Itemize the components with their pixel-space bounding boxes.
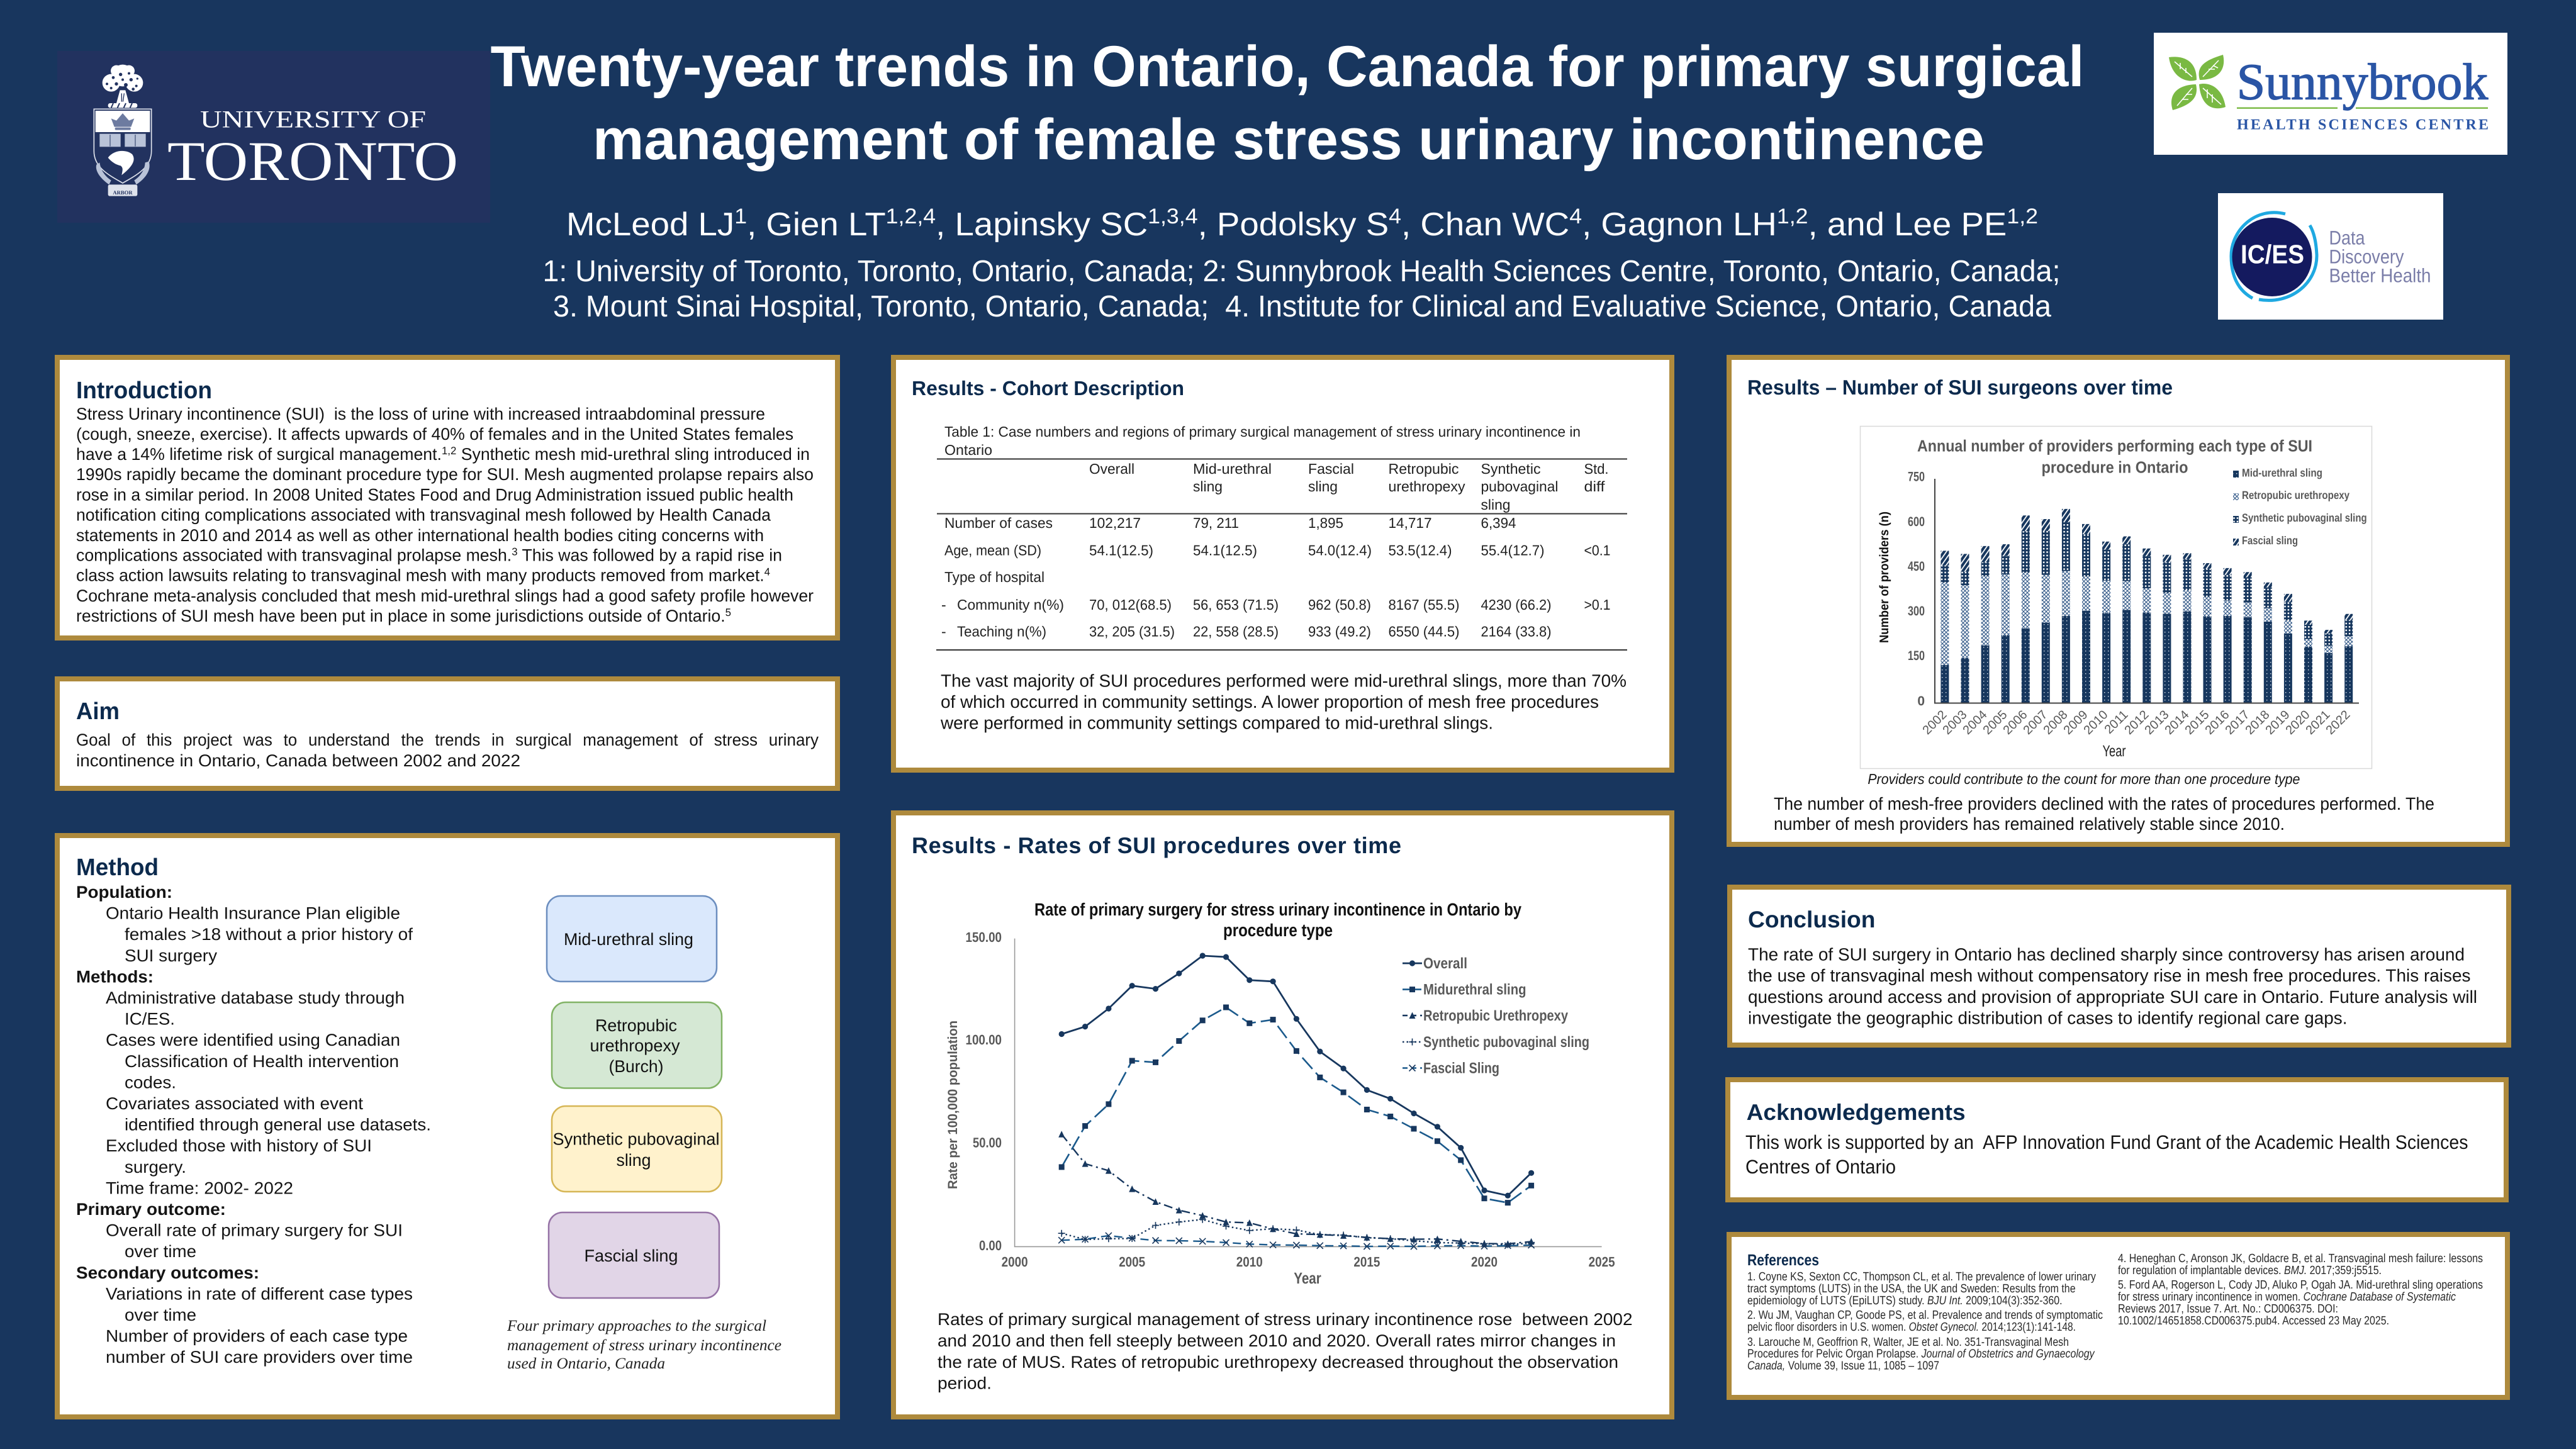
tagline: Better Health: [2329, 265, 2431, 287]
table row: age: <0.1: [1584, 542, 1611, 559]
y axis labels: 0: [1917, 694, 1925, 708]
text block: method details: over time: [125, 1242, 196, 1261]
table header: Fascial: [1308, 461, 1354, 477]
line chart: rate of primary surgery: [946, 900, 1615, 1287]
x axis labels: 2018: [2243, 708, 2273, 737]
panel: results rates of SUI procedures: [893, 813, 1672, 1417]
text block: method details: SUI surgery: [125, 946, 218, 965]
bars: synthetic pubovaginal sling: [1940, 522, 2353, 646]
wordmark: [167, 106, 458, 193]
box: synthetic pubovaginal sling: sling: [617, 1151, 651, 1170]
table header: [1089, 461, 1608, 513]
box: retropubic urethropexy: Retropubic: [595, 1016, 677, 1035]
references: left column: 2. Wu JM, Vaughan CP, Goode PS, et al. Prevalence and trends of symptomatic: [1747, 1309, 2103, 1322]
references: left column: 3. Larouche M, Geoffrion R, Walter, JE et al. No. 351-Transvaginal Mesh: [1747, 1336, 2069, 1349]
figure caption: Four primary approaches to the surgical: [507, 1318, 766, 1334]
x axis labels: 2010: [1236, 1254, 1263, 1270]
table row: age: [944, 542, 1611, 559]
series: midurethral sling: [1061, 1007, 1532, 1203]
wordmark: UNIVERSITY OF: [200, 106, 426, 133]
authors: 1: [734, 204, 747, 228]
text block: conclusion body: investigate the geographic distribution of cases to identify regional care gaps.: [1748, 1008, 2347, 1027]
text block: method details: IC/ES.: [125, 1010, 175, 1029]
text block: cohort summary: [940, 671, 1627, 732]
tagline: Discovery: [2329, 245, 2404, 267]
icon: four green leaves: [2169, 55, 2226, 110]
text block: rates summary: [938, 1310, 1632, 1393]
figure caption: used in Ontario, Canada: [507, 1355, 665, 1372]
x axis labels: 2022: [2324, 708, 2353, 737]
references: right column: 4. Heneghan C, Aronson JK, Goldacre B, et al. Transvaginal mesh failure: lessons: [2118, 1252, 2483, 1265]
heading: rates of procedures: Results - Rates of SUI procedures over time: [912, 832, 1401, 858]
table header: urethropexy: [1388, 478, 1465, 495]
references: right column: for regulation of implantable devices. BMJ. 2017;359:j5515.: [2118, 1264, 2382, 1277]
text block: method details: Time frame: 2002- 2022: [106, 1178, 293, 1197]
heading: method: Method: [76, 854, 159, 881]
wordmark: Sunnybrook: [2237, 53, 2488, 111]
box: retropubic urethropexy: [552, 1002, 722, 1088]
x axis labels: 2014: [2163, 708, 2192, 737]
icon: IC/ES circle: [2231, 213, 2317, 300]
y axis labels: 600: [1908, 515, 1925, 529]
table row: type of hospital: Type of hospital: [944, 569, 1044, 585]
text block: method details: Classification of Health intervention: [125, 1052, 399, 1071]
table caption: Ontario: [944, 442, 992, 458]
text block: aim body: incontinence in Ontario, Canada between 2002 and 2022: [76, 751, 520, 770]
title: [491, 35, 2084, 172]
box: fascial sling: [549, 1212, 719, 1298]
text block: introduction body: rose in a similar period. In 2008 United States Food and Drug Administration issued public health: [76, 486, 793, 505]
text block: introduction body: 4: [764, 566, 770, 578]
x axis labels: 2011: [2102, 708, 2131, 737]
authors: , Chan WC: [1401, 206, 1569, 243]
text block: rates summary: Rates of primary surgical management of stress urinary incontinence rose between 2002: [938, 1310, 1632, 1329]
y axis labels: 300: [1908, 604, 1925, 618]
logo: Sunnybrook Health Sciences Centre: [2154, 33, 2507, 155]
x axis labels: 2007: [2021, 708, 2051, 737]
chart legend: Retropubic urethropexy: [2242, 489, 2349, 501]
y axis labels: [965, 929, 1002, 1253]
references: right column: Reviews 2017, Issue 7. Art. No.: CD006375. DOI:: [2118, 1302, 2338, 1316]
title: management of female stress urinary incontinence: [593, 108, 1985, 172]
bars: retropubic urethropexy: [1940, 571, 2353, 665]
table row: community: 8167 (55.5): [1388, 596, 1460, 613]
table row: age: 53.5(12.4): [1388, 542, 1452, 559]
bars: mid-urethral sling: [1940, 610, 2353, 703]
text block: method details: over time: [125, 1306, 196, 1324]
x axis labels: 2006: [2001, 708, 2030, 737]
x axis labels: 2000: [1002, 1254, 1028, 1270]
text block: introduction body: statements in 2010 and 2014 as well as other international health bodies citing concerns with: [76, 526, 764, 545]
x axis labels: 2019: [2263, 708, 2293, 737]
text block: conclusion body: [1748, 945, 2477, 1027]
text block: introduction body: have a 14% lifetime risk of surgical management.: [76, 445, 446, 464]
table row: community: [941, 596, 1611, 613]
text block: cohort summary: of which occurred in community settings. A lower proportion of mesh free procedures: [941, 692, 1599, 712]
text block: method details: number of SUI care providers over time: [106, 1348, 413, 1367]
x axis labels: 2002: [1920, 708, 1950, 737]
tagline: [2329, 227, 2431, 287]
text block: conclusion body: questions around access and provision of appropriate SUI care in Ontario. Future analysis will: [1748, 987, 2477, 1007]
x axis labels: 2017: [2223, 708, 2253, 737]
references: right column: [2118, 1252, 2483, 1328]
panel: acknowledgements: [1728, 1080, 2506, 1200]
y axis labels: [1908, 470, 1925, 708]
text block: method details: females >18 without a prior history of: [125, 925, 413, 944]
table header: Retropubic: [1388, 461, 1459, 477]
text block: introduction body: notification citing complications associated with transvaginal mesh followed by Health Canada: [76, 506, 771, 525]
authors: , Lapinsky SC: [936, 206, 1148, 243]
table row: number of cases: Number of cases: [944, 515, 1053, 531]
series: overall: [1061, 956, 1532, 1195]
authors: 1,3,4: [1148, 204, 1198, 228]
references: left column: pelvic floor disorders in U.S. women. Obstet Gynecol. 2014;123(1):141-148.: [1747, 1321, 2076, 1334]
text block: method details: Excluded those with history of SUI: [106, 1136, 372, 1155]
x axis labels: [1002, 1254, 1615, 1270]
text block: introduction body: [76, 405, 814, 625]
wordmark: HEALTH SCIENCES CENTRE: [2237, 117, 2489, 133]
table row: community: 4230 (66.2): [1481, 596, 1552, 613]
x axis labels: 2020: [1471, 1254, 1498, 1270]
table: case numbers: [936, 423, 1627, 650]
y axis title: Number of providers (n): [1878, 512, 1891, 643]
text block: aim body: [76, 730, 819, 770]
text block: method details: Variations in rate of different case types: [106, 1284, 413, 1303]
chart title: Rate of primary surgery for stress urinary incontinence in Ontario by: [1034, 900, 1521, 919]
chart title: Annual number of providers performing each type of SUI: [1917, 437, 2312, 456]
text block: method details: Methods:: [76, 967, 154, 986]
text block: introduction body: 5: [725, 607, 731, 618]
figure caption: [507, 1318, 781, 1372]
table row: teaching: 22, 558 (28.5): [1193, 624, 1279, 640]
wordmark: TORONTO: [167, 131, 458, 193]
bar chart: annual number of providers: [1860, 427, 2372, 769]
icon: IC/ES circle: IC/ES: [2241, 240, 2304, 269]
authors: 1,2: [1777, 204, 1808, 228]
table row: age: 55.4(12.7): [1481, 542, 1544, 559]
panel: aim: [57, 679, 837, 788]
chart legend: Midurethral sling: [1423, 982, 1526, 999]
x axis labels: 2005: [1119, 1254, 1145, 1270]
table header: diff: [1584, 478, 1605, 495]
chart title: procedure type: [1223, 920, 1333, 940]
references: right column: for stress urinary incontinence in women. Cochrane Database of Systematic: [2118, 1290, 2456, 1304]
table row: teaching: 933 (49.2): [1308, 624, 1371, 640]
text block: rates summary: the rate of MUS. Rates of retropubic urethropexy decreased throughout the observation: [938, 1353, 1618, 1372]
authors: 4: [1389, 204, 1401, 228]
table header: Overall: [1089, 461, 1134, 477]
x axis labels: 2015: [2183, 708, 2212, 737]
table row: community: Community n(%): [957, 596, 1064, 613]
table row: teaching: Teaching n(%): [957, 624, 1046, 640]
box: synthetic pubovaginal sling: Synthetic pubovaginal: [552, 1130, 720, 1149]
box: retropubic urethropexy: (Burch): [609, 1057, 663, 1076]
chart legend: Synthetic pubovaginal sling: [1423, 1034, 1589, 1051]
y axis labels: 750: [1908, 470, 1925, 484]
text block: introduction body: Stress Urinary incontinence (SUI) is the loss of urine with increased intraabdominal pressure: [76, 405, 765, 423]
chart title: [1917, 437, 2312, 476]
table row: age: Age, mean (SD): [944, 542, 1041, 559]
text block: rates summary: and 2010 and then fell steeply between 2010 and 2020. Overall rates mirror changes in: [938, 1331, 1616, 1350]
x axis labels: 2025: [1589, 1254, 1615, 1270]
table header: sling: [1308, 478, 1338, 495]
panel: results cohort description: [893, 357, 1672, 770]
x axis labels: 2013: [2142, 708, 2172, 737]
text block: rates summary: period.: [938, 1374, 992, 1393]
table row: number of cases: 79, 211: [1193, 515, 1239, 531]
references: left column: tract symptoms (LUTS) in the USA, the UK and Sweden: Results from the: [1747, 1282, 2076, 1295]
x axis labels: 2020: [2283, 708, 2313, 737]
table row: age: 54.1(12.5): [1193, 542, 1257, 559]
table header: sling: [1481, 496, 1510, 513]
tagline: Data: [2329, 227, 2365, 249]
chart title: [1034, 900, 1521, 940]
heading: introduction: Introduction: [76, 378, 212, 404]
text block: introduction body: 3: [512, 546, 518, 557]
chart legend: Fascial sling: [2242, 534, 2298, 547]
table caption: [944, 423, 1581, 458]
series: fascial sling: [1061, 1236, 1532, 1246]
chart legend: Synthetic pubovaginal sling: [2242, 512, 2367, 524]
chart legend: Retropubic Urethropexy: [1423, 1007, 1569, 1024]
table row: teaching: 2164 (33.8): [1481, 624, 1552, 640]
panel: method: [57, 836, 837, 1417]
chart title: procedure in Ontario: [2041, 457, 2188, 476]
y axis title: Rate per 100,000 population: [946, 1021, 960, 1189]
y axis labels: 0.00: [979, 1238, 1002, 1253]
text block: acknowledgements body: This work is supported by an AFP Innovation Fund Grant of the Academic Health Sciences: [1745, 1131, 2468, 1153]
x axis labels: [1920, 708, 2353, 737]
table row: community: 962 (50.8): [1308, 596, 1371, 613]
text block: introduction body: (cough, sneeze, exercise). It affects upwards of 40% of females and in the United States females: [76, 425, 793, 444]
text block: introduction body: 1,2: [442, 445, 456, 457]
text block: conclusion body: the use of transvaginal mesh without compensatory rise in mesh free procedures. This raises: [1748, 966, 2470, 985]
affiliations: [542, 255, 2060, 323]
chart legend: [1403, 955, 1589, 1077]
table row: teaching: [941, 624, 1552, 640]
panel: results number of SUI surgeons: [1729, 357, 2507, 844]
text block: introduction body: Synthetic mesh mid-urethral sling introduced in: [456, 445, 810, 464]
table row: community: 56, 653 (71.5): [1193, 596, 1279, 613]
authors: , Gien LT: [747, 206, 886, 243]
text block: introduction body: This was followed by a rapid rise in: [518, 546, 782, 565]
table row: number of cases: 14,717: [1388, 515, 1432, 531]
x axis title: Year: [1294, 1270, 1321, 1287]
text block: method details: Primary outcome:: [76, 1200, 226, 1219]
text block: surgeons summary: The number of mesh-free providers declined with the rates of procedures performed. The: [1774, 794, 2434, 814]
text block: method details: Secondary outcomes:: [76, 1263, 259, 1282]
table header: Synthetic: [1481, 461, 1540, 477]
series: retropubic urethropexy: [1061, 1134, 1532, 1244]
text block: cohort summary: The vast majority of SUI procedures performed were mid-urethral slings, more than 70%: [941, 671, 1627, 691]
table caption: Table 1: Case numbers and regions of primary surgical management of stress urinary incontinence in: [944, 423, 1581, 440]
authors: 1,2,4: [886, 204, 936, 228]
figure caption: management of stress urinary incontinence: [507, 1337, 781, 1354]
authors: 1,2: [2007, 204, 2038, 228]
heading: aim: Aim: [76, 698, 120, 725]
heading: cohort description: Results - Cohort Description: [912, 377, 1184, 400]
y axis labels: 150.00: [965, 929, 1002, 945]
text block: aim body: Goal of this project was to understand the trends in surgical management of stress urinary: [76, 730, 819, 749]
y axis labels: 450: [1908, 559, 1925, 574]
table row: community: 70, 012(68.5): [1089, 596, 1172, 613]
authors: 4: [1569, 204, 1582, 228]
panel: conclusion: [1730, 887, 2509, 1045]
table row: number of cases: 102,217: [1089, 515, 1141, 531]
chart legend: Overall: [1423, 955, 1467, 972]
affiliations: 1: University of Toronto, Toronto, Ontario, Canada; 2: Sunnybrook Health Sciences Centre, Toronto, Ontario, Canada;: [542, 255, 2060, 288]
text block: method details: Covariates associated with event: [106, 1094, 364, 1113]
x axis labels: 2009: [2061, 708, 2091, 737]
heading: conclusion: Conclusion: [1748, 907, 1875, 932]
x axis labels: 2004: [1961, 708, 1990, 737]
text block: method details: surgery.: [125, 1158, 186, 1177]
text block: acknowledgements body: Centres of Ontario: [1745, 1156, 1896, 1178]
chart legend: Mid-urethral sling: [2242, 467, 2322, 479]
box: synthetic pubovaginal sling: [552, 1106, 722, 1192]
logo: University of Toronto: [57, 51, 490, 223]
y axis labels: 150: [1908, 649, 1925, 663]
chart legend: Fascial Sling: [1423, 1060, 1499, 1077]
table header: Std.: [1584, 461, 1608, 477]
x axis labels: 2005: [1981, 708, 2010, 737]
panel: references: [1729, 1234, 2507, 1397]
affiliations: 3. Mount Sinai Hospital, Toronto, Ontario, Canada; 4. Institute for Clinical and Evaluative Science, Ontario, Canada: [553, 290, 2051, 323]
table row: number of cases: 6,394: [1481, 515, 1516, 531]
text block: method details: [76, 883, 431, 1367]
text block: introduction body: restrictions of SUI mesh have been put in place in some jurisdictions outside of Ontario.: [76, 607, 734, 625]
text block: method details: Ontario Health Insurance Plan eligible: [106, 904, 400, 923]
references: left column: Canada, Volume 39, Issue 11, 1085 – 1097: [1747, 1359, 1939, 1373]
x axis labels: 2008: [2041, 708, 2071, 737]
text block: method details: Number of providers of each case type: [106, 1327, 408, 1346]
text block: introduction body: complications associated with transvaginal prolapse mesh.: [76, 546, 517, 565]
references: left column: epidemiology of LUTS (EpiLUTS) study. BJU Int. 2009;104(3):352-360.: [1747, 1294, 2063, 1307]
x axis title: Year: [2103, 742, 2125, 760]
references: right column: 5. Ford AA, Rogerson L, Cody JD, Aluko P, Ogah JA. Mid-urethral sling operations: [2118, 1278, 2483, 1292]
text block: introduction body: class action lawsuits relating to transvaginal mesh with many products removed from market.: [76, 566, 774, 585]
x axis labels: 2021: [2304, 708, 2333, 737]
table row: teaching: 6550 (44.5): [1388, 624, 1460, 640]
text block: method details: Cases were identified using Canadian: [106, 1031, 400, 1049]
table row: age: 54.1(12.5): [1089, 542, 1153, 559]
text block: surgeons summary: [1774, 794, 2434, 834]
text block: method details: Overall rate of primary surgery for SUI: [106, 1221, 403, 1240]
heading: acknowledgements: Acknowledgements: [1747, 1099, 1966, 1125]
heading: number of surgeons: Results – Number of SUI surgeons over time: [1747, 376, 2173, 399]
text block: introduction body: Cochrane meta-analysis concluded that mesh mid-urethral slings had a good safety profile however: [76, 586, 814, 605]
authors: , Podolsky S: [1198, 206, 1389, 243]
text block: method details: Administrative database study through: [106, 988, 405, 1007]
authors: , Gagnon LH: [1582, 206, 1777, 243]
table row: teaching: -: [941, 624, 946, 640]
y axis labels: 50.00: [973, 1135, 1002, 1150]
table row: community: -: [941, 596, 946, 613]
title: Twenty-year trends in Ontario, Canada for primary surgical: [491, 35, 2084, 99]
table row: number of cases: 1,895: [1308, 515, 1343, 531]
table row: teaching: 32, 205 (31.5): [1089, 624, 1175, 640]
logo: IC/ES: [2218, 193, 2443, 320]
text block: surgeons summary: number of mesh providers has remained relatively stable since 2010.: [1774, 814, 2285, 834]
y axis labels: 100.00: [965, 1032, 1002, 1048]
x axis labels: 2015: [1353, 1254, 1380, 1270]
table header: pubovaginal: [1481, 478, 1558, 495]
table row: number of cases: [944, 515, 1516, 531]
icon: University of Toronto crest: ARBOR: [113, 189, 133, 196]
table row: community: >0.1: [1584, 596, 1611, 613]
heading: references: References: [1747, 1251, 1819, 1269]
text block: conclusion body: The rate of SUI surgery in Ontario has declined sharply since controversy has arisen around: [1748, 945, 2465, 965]
x axis labels: 2012: [2122, 708, 2152, 737]
text block: cohort summary: were performed in community settings compared to mid-urethral slings.: [940, 713, 1493, 732]
box: retropubic urethropexy: urethropexy: [590, 1036, 680, 1055]
box: mid-urethral sling: [547, 896, 717, 982]
text block: method details: codes.: [125, 1073, 176, 1092]
references: left column: [1747, 1270, 2103, 1373]
chart note: Providers could contribute to the count for more than one procedure type: [1868, 771, 2300, 787]
references: left column: Procedures for Pelvic Organ Prolapse. Journal of Obstetrics and Gynaecology: [1747, 1348, 2095, 1360]
table row: age: 54.0(12.4): [1308, 542, 1372, 559]
authors: , and Lee PE: [1808, 206, 2007, 243]
panel: introduction: [57, 357, 837, 638]
box: mid-urethral sling: Mid-urethral sling: [564, 930, 693, 949]
authors: McLeod LJ: [566, 206, 726, 243]
series: synthetic pubovaginal sling: [1061, 1219, 1532, 1245]
chart legend: [2233, 467, 2367, 547]
text block: acknowledgements body: [1745, 1131, 2468, 1178]
bars: fascial sling: [1940, 509, 2353, 634]
x axis labels: 2010: [2081, 708, 2111, 737]
table header: sling: [1193, 478, 1223, 495]
x axis labels: 2016: [2203, 708, 2232, 737]
references: left column: 1. Coyne KS, Sexton CC, Thompson CL, et al. The prevalence of lower urinary: [1747, 1270, 2096, 1284]
text block: introduction body: 1990s rapidly became the dominant procedure type for SUI. Mesh augmented prolapse repairs also: [76, 465, 814, 484]
text block: method details: Population:: [76, 883, 172, 902]
icon: University of Toronto crest: [94, 65, 152, 196]
x axis labels: 2003: [1940, 708, 1970, 737]
table header: Mid-urethral: [1193, 461, 1272, 477]
references: right column: 10.1002/14651858.CD006375.pub4. Accessed 23 May 2025.: [2118, 1314, 2389, 1328]
text block: method details: identified through general use datasets.: [125, 1116, 431, 1134]
box: fascial sling: Fascial sling: [584, 1246, 678, 1265]
